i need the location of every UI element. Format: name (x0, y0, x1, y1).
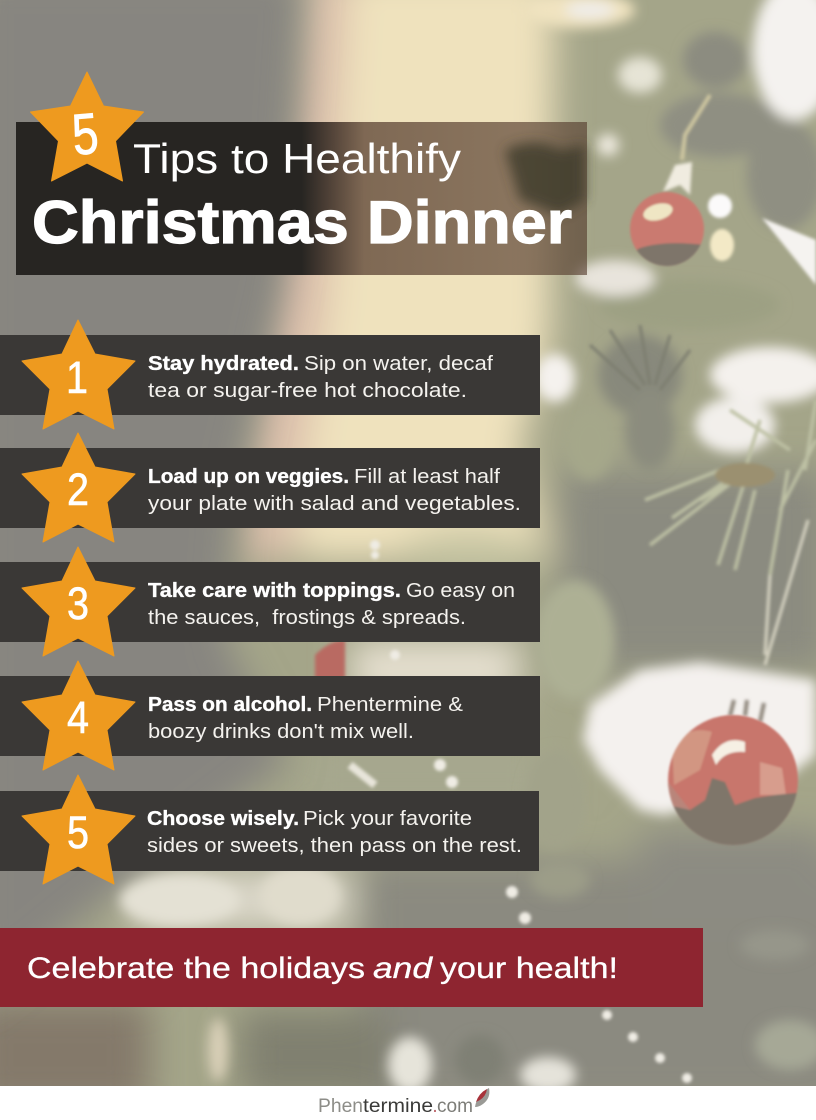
tip 4 star: 4 (67, 692, 89, 743)
tip 2 star (22, 433, 135, 542)
tip 3 text (148, 579, 515, 629)
tip 5 star (22, 775, 135, 884)
tip 1 text (148, 352, 493, 402)
tip 5 text (147, 807, 522, 857)
tip 4 star (22, 661, 135, 770)
tip 5 star: 5 (67, 807, 89, 858)
title star with number 5: 5 (69, 101, 101, 168)
closing banner (0, 928, 703, 1007)
tip 5 bar (0, 775, 539, 884)
footer logo text: Phen (318, 1096, 363, 1117)
tip 1 text: Sip on water, decaf (304, 352, 493, 375)
ornament: small red bauble (629, 190, 705, 267)
tip 3 text: the sauces, frostings & spreads. (148, 606, 466, 629)
tip 1 bar (0, 320, 540, 429)
title band (16, 72, 587, 275)
tip 2 text (148, 465, 521, 515)
tip 4 text: boozy drinks don't mix well. (148, 720, 414, 743)
icon: feather leaf (475, 1088, 489, 1107)
tip 5 text: sides or sweets, then pass on the rest. (147, 834, 522, 857)
tip 2 star: 2 (67, 464, 89, 515)
ornament: large red bauble (666, 714, 799, 846)
tip 4 bar (0, 661, 540, 770)
footer logo text: termine (363, 1096, 433, 1117)
tip 3 bar (0, 547, 540, 656)
footer logo text: . (433, 1096, 437, 1117)
tip 2 text: Load up on veggies. (148, 465, 349, 488)
tip 3 text: Go easy on (406, 579, 515, 602)
closing banner: your health! (440, 952, 618, 985)
tip 3 star (22, 547, 135, 656)
closing banner: and (373, 952, 434, 985)
tip 2 text: your plate with salad and vegetables. (148, 492, 521, 515)
grey left side (0, 0, 305, 1010)
title line 1: Tips to Healthify (133, 135, 461, 182)
tip 1 star: 1 (66, 352, 88, 403)
footer logo text: com (437, 1096, 473, 1117)
footer (0, 1086, 816, 1120)
footer logo text (318, 1096, 473, 1117)
tip 1 text: tea or sugar-free hot chocolate. (148, 379, 467, 402)
tip 5 text: Pick your favorite (303, 807, 472, 830)
tip 2 text: Fill at least half (354, 465, 500, 488)
title line 2: Christmas Dinner (32, 189, 572, 256)
tip 2 bar (0, 433, 540, 542)
tip 3 star: 3 (67, 578, 89, 629)
tip 1 star (22, 320, 135, 429)
tip 5 text: Choose wisely. (147, 807, 299, 830)
tip 3 text: Take care with toppings. (148, 579, 401, 602)
closing banner: Celebrate the holidays (27, 952, 365, 985)
tip 4 text (148, 693, 463, 743)
title star with number 5 (30, 72, 144, 181)
tip 4 text: Pass on alcohol. (148, 693, 312, 716)
tip 1 text: Stay hydrated. (148, 352, 299, 375)
tip 4 text: Phentermine & (317, 693, 463, 716)
